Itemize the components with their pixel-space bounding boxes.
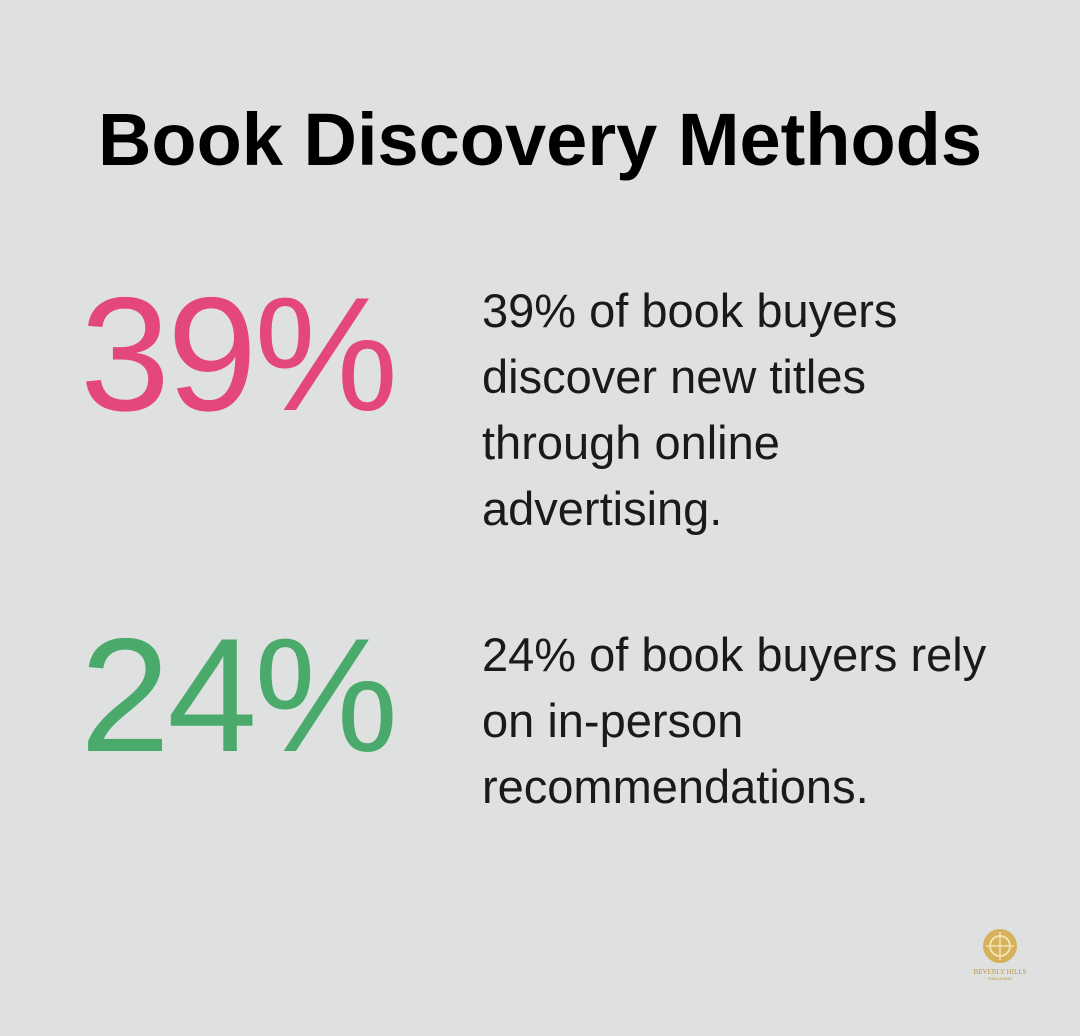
- stat: 39%: 39%: [80, 264, 395, 445]
- text: 24% description: recommendations.: [482, 760, 869, 813]
- text: 39% description: advertising.: [482, 482, 722, 535]
- text: 24% description: on in-person: [482, 694, 743, 747]
- text: 39% description: [482, 284, 897, 535]
- text: 39% description: 39% of book buyers: [482, 284, 897, 337]
- logo: Beverly Hills Publishing: PUBLISHING: [988, 976, 1012, 981]
- text: 39% description: discover new titles: [482, 350, 866, 403]
- stat: 24%: 24%: [80, 605, 395, 786]
- title: Book Discovery Methods: [98, 98, 982, 181]
- text: 24% description: 24% of book buyers rely: [482, 628, 986, 681]
- logo: Beverly Hills Publishing: [974, 929, 1026, 981]
- text: 39% description: through online: [482, 416, 780, 469]
- text: 24% description: [482, 628, 986, 813]
- logo: Beverly Hills Publishing: BEVERLY HILLS: [974, 968, 1026, 976]
